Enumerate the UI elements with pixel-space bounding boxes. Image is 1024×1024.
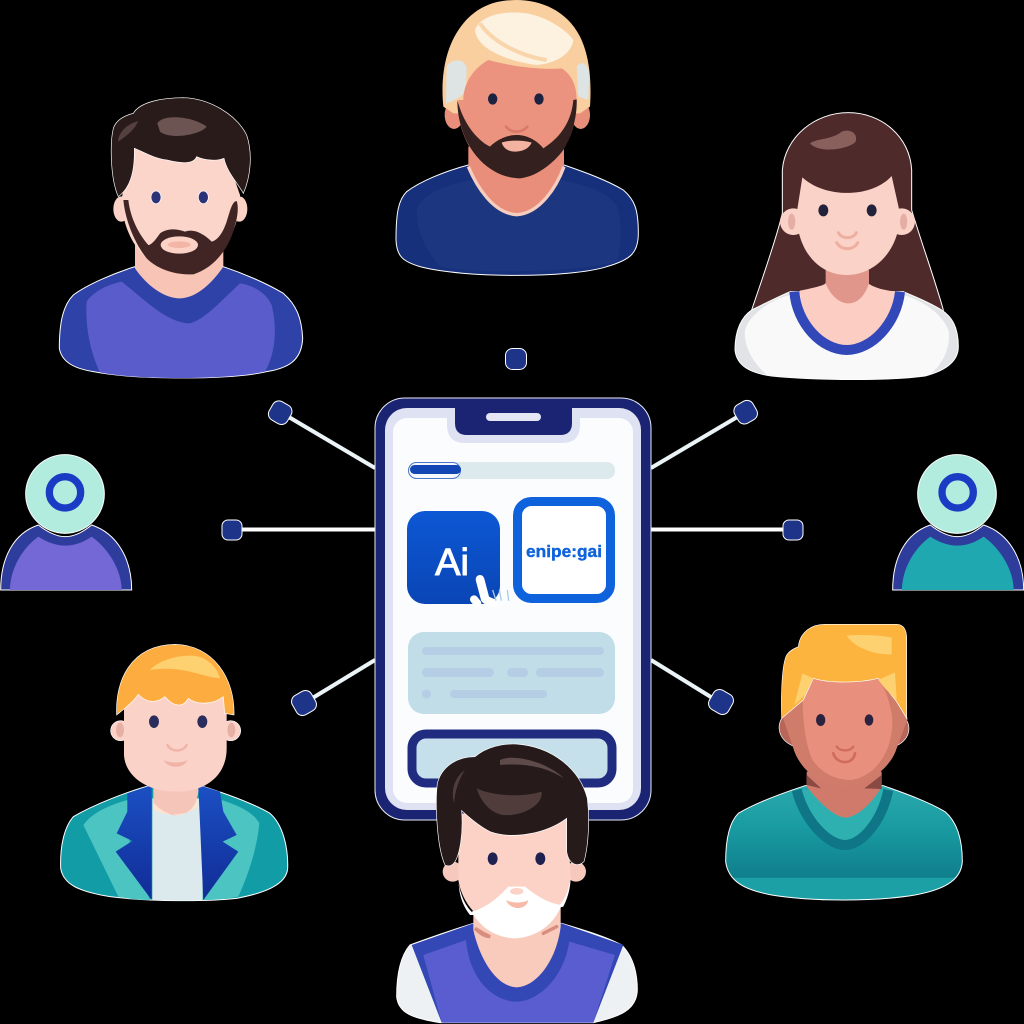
- connector: middle left: [222, 520, 375, 540]
- connector: lower left: [289, 660, 375, 718]
- connector: middle right: [651, 520, 803, 540]
- person: bottom center, dark hair and white beard: [397, 744, 637, 1023]
- icon: pointing hand: [474, 579, 509, 603]
- app tile: label: [518, 502, 610, 598]
- small avatar: left, purple: [1, 455, 132, 590]
- small avatar: right, teal: [893, 455, 1024, 590]
- progress bar: [408, 462, 615, 479]
- text card placeholder: [408, 632, 615, 714]
- phone button: [412, 734, 612, 783]
- person: upper left, dark hair and beard: [59, 98, 303, 378]
- connector: top node: [506, 348, 526, 370]
- phone notch: [447, 404, 580, 443]
- person: lower left, orange hair and teal blazer: [61, 644, 288, 901]
- app tile: Ai: [407, 511, 500, 604]
- connector: upper right: [651, 398, 760, 468]
- person: upper right, long brown hair: [735, 113, 958, 379]
- app tile: Ai: Ai: [435, 542, 469, 584]
- connector: lower right: [651, 660, 736, 717]
- connector: upper left: [266, 398, 375, 468]
- phone: [375, 398, 651, 820]
- person: lower right, blond quiff and teal sweater: [726, 624, 962, 900]
- app tile: label: enipe:gai: [526, 542, 602, 561]
- person: top, blond hair and dark beard: [396, 0, 638, 275]
